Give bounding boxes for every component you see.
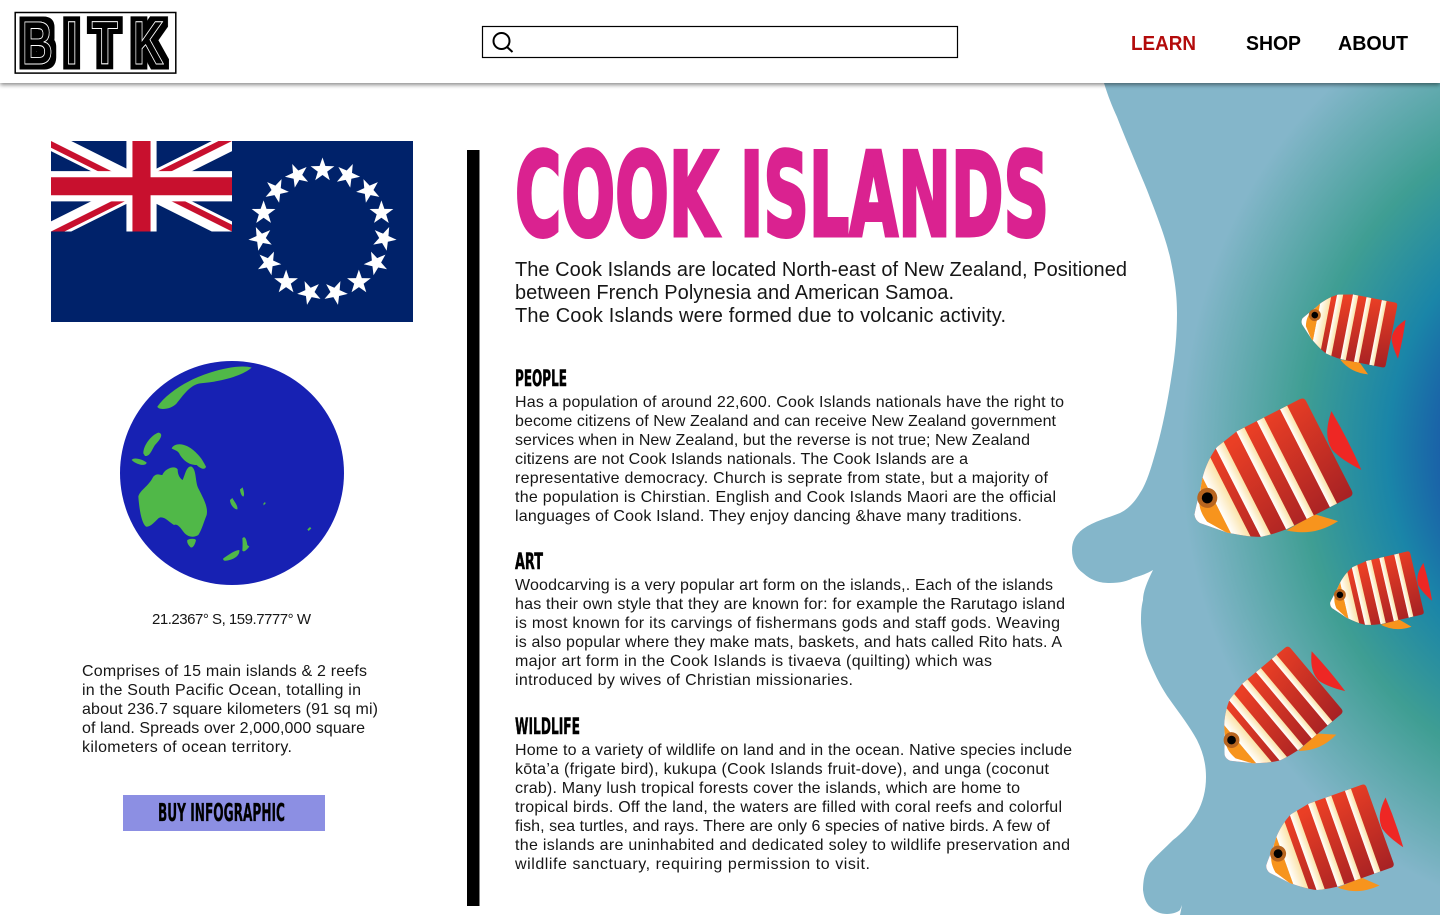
wildlife text: the islands are uninhabited and dedicated soley to wildlife preservation and: [515, 837, 1070, 854]
island facts text: in the South Pacific Ocean, totalling in: [82, 682, 361, 699]
people text: the population is Chirstian. English and Cook Islands Maori are the official: [515, 489, 1056, 506]
header bar: [0, 0, 1440, 83]
wildlife text: kōta’a (frigate bird), kukupa (Cook Islands fruit-dove), and unga (coconut: [515, 761, 1050, 778]
art text: [515, 577, 1065, 689]
buy infographic button: BUY INFOGRAPHIC: [158, 798, 285, 827]
art text: has their own style that they are known for: for example the Rarutago island: [515, 596, 1065, 613]
people text: Has a population of around 22,600. Cook Islands nationals have the right to: [515, 394, 1064, 411]
intro text: [515, 259, 1127, 327]
art text: introduced by wives of Christian missionaries.: [515, 672, 853, 689]
navigation: LEARN: [1131, 33, 1196, 55]
vertical divider: [467, 150, 480, 906]
art text: is most known for its carvings of fishermans gods and staff gods. Weaving: [515, 615, 1060, 632]
people text: become citizens of New Zealand and can receive New Zealand government: [515, 413, 1057, 430]
heading: art: ART: [515, 550, 543, 575]
island facts text: of land. Spreads over 2,000,000 square: [82, 720, 365, 737]
heading: people: PEOPLE: [515, 367, 567, 392]
fish 1: [1292, 282, 1410, 380]
wildlife text: crab). Many lush tropical forests cover the islands, which are home to: [515, 780, 1020, 797]
art text: Woodcarving is a very popular art form on the islands,. Each of the islands: [515, 577, 1053, 594]
island facts text: Comprises of 15 main islands & 2 reefs: [82, 663, 367, 680]
intro text: between French Polynesia and American Samoa.: [515, 282, 954, 304]
wildlife text: Home to a variety of wildlife on land and in the ocean. Native species include: [515, 742, 1072, 759]
sea background shape: [1072, 83, 1440, 915]
Cook Islands flag: [51, 141, 413, 322]
navigation: ABOUT: [1338, 33, 1408, 55]
logo: BITK: [22, 10, 164, 78]
wildlife text: wildlife sanctuary, requiring permission to visit.: [514, 856, 870, 873]
people text: languages of Cook Island. They enjoy dancing &have many traditions.: [515, 508, 1022, 525]
navigation: [1131, 33, 1408, 55]
island facts text: [82, 663, 378, 756]
people text: representative democracy. Church is seprate from state, but a majority of: [515, 470, 1049, 487]
intro text: The Cook Islands are located North-east of New Zealand, Positioned: [515, 259, 1127, 281]
art text: major art form in the Cook Islands is tivaeva (quilting) which was: [515, 653, 992, 670]
heading: wildlife: WILDLIFE: [515, 715, 580, 740]
buy infographic button: [123, 795, 325, 831]
wildlife text: tropical birds. Off the land, the waters are filled with coral reefs and colorful: [515, 799, 1062, 816]
intro text: The Cook Islands were formed due to volcanic activity.: [515, 305, 1006, 327]
people text: [515, 394, 1064, 525]
fish 3: [1320, 545, 1437, 644]
people text: services when in New Zealand, but the reverse is not true; New Zealand: [515, 432, 1030, 449]
navigation: SHOP: [1246, 33, 1301, 55]
fish 4: [1192, 633, 1364, 800]
globe: [120, 361, 344, 585]
search box: [482, 26, 958, 58]
people text: citizens are not Cook Islands nationals. The Cook Islands are a: [515, 451, 968, 468]
wildlife text: fish, sea turtles, and rays. There are only 6 species of native birds. A few of: [515, 818, 1051, 835]
fish 5: [1247, 775, 1413, 915]
wildlife text: [514, 742, 1072, 873]
island facts text: kilometers of ocean territory.: [82, 739, 292, 756]
fish 2: [1164, 384, 1378, 580]
island facts text: about 236.7 square kilometers (91 sq mi): [82, 701, 378, 718]
art text: is also popular where they make mats, baskets, and hats called Rito hats. A: [515, 634, 1062, 651]
coordinates: 21.2367° S, 159.7777° W: [152, 611, 312, 628]
